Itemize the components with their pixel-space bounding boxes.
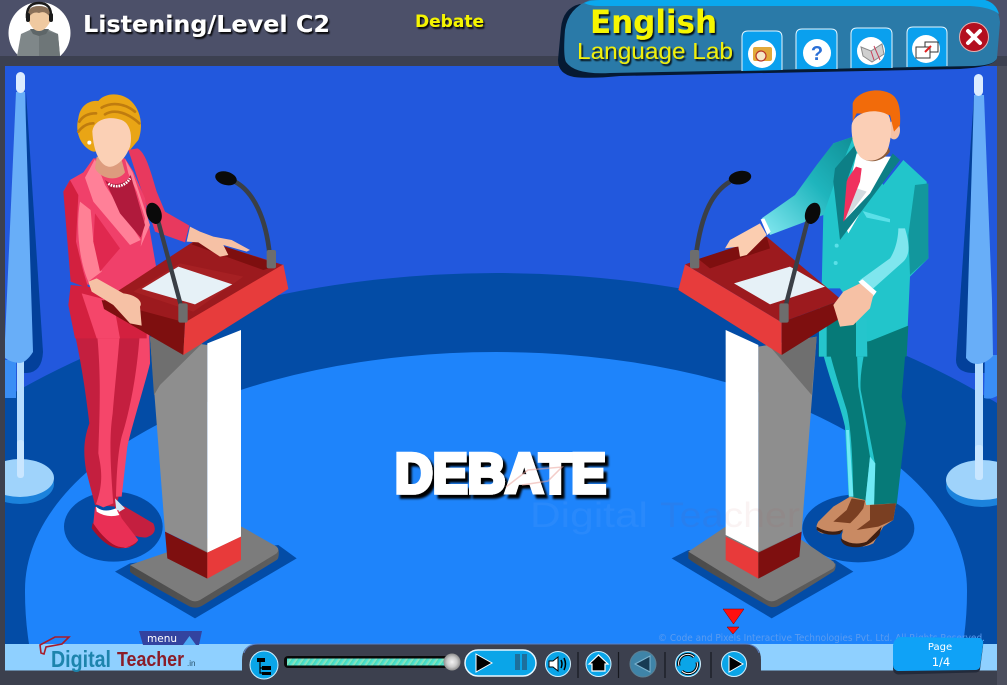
progress slider [284,654,460,670]
neck [95,157,125,178]
page counter: Page [928,642,952,653]
trousers top [818,289,908,357]
back mic [696,182,730,255]
top header bar [0,0,1007,57]
control bar [242,644,761,685]
front mic [158,222,182,308]
shoes [115,503,155,537]
tab: help: ? [811,43,823,65]
shoes [816,497,867,534]
base plate shadow [672,550,853,618]
tab: help [796,29,837,69]
left lamp [0,72,54,504]
foot shadow [802,494,914,562]
podium top [685,237,842,322]
next button [722,652,746,676]
menu tab [139,631,202,645]
bright blue platform [25,352,967,644]
watermark: Teacher [660,496,800,535]
tab: folder clock [742,31,782,71]
heading: English: English [590,3,717,41]
watermark: Digital [530,496,648,535]
foot shadow [64,492,163,562]
title: Listening/Level C2: Listening/Level C2 [83,12,330,38]
base plate [688,552,836,607]
paper [734,267,825,304]
paper [142,267,232,304]
right lamp [946,74,997,507]
replay button [676,652,700,676]
dark blue back platform [5,273,997,644]
icon: graduation cap [40,637,69,654]
pillar [758,337,817,552]
shaded sleeve [908,183,928,275]
back button disabled [630,651,656,677]
hair [77,94,141,152]
woman upper body and left podium [63,94,288,355]
subtitle: Debate: Debate [415,12,484,32]
speaker button [546,652,570,676]
front mic [785,222,807,308]
tab: resize [907,27,947,67]
logo: Digital Teacher: .in [187,659,195,668]
back mic [235,182,270,258]
page counter: 1/4 [932,655,950,669]
trousers top [68,285,147,338]
trousers [74,330,150,507]
cuffs [761,218,771,235]
woman legs and left podium base [64,330,297,618]
watermark [530,496,800,535]
panel: English Language Lab [558,0,1000,78]
blouse [105,175,145,238]
jacket [63,158,157,297]
pocket [863,211,890,222]
neck [858,142,890,161]
hair [853,90,900,132]
left arm [762,137,853,235]
home button [586,652,611,676]
frame band [0,56,1007,66]
page counter [893,637,983,674]
tree menu button [250,651,278,679]
man upper body and right podium [678,90,928,357]
sleeve highlight [860,228,909,288]
base plate shadow [115,545,297,618]
podium faces [102,300,185,355]
logo: Digital Teacher: Digital [51,646,111,672]
tie [842,167,862,228]
earring [87,141,91,145]
menu tab: menu [147,633,177,645]
play and pause button [465,650,536,676]
marker: red triangles [723,609,744,634]
face [92,118,131,167]
right sleeve [128,148,189,242]
heading: Language Lab: Language Lab [577,38,733,64]
hands [725,223,767,257]
buttons [835,244,839,248]
watermark cap [506,467,562,487]
heading: DEBATE: DEBATE [395,442,606,504]
ear [888,121,900,139]
copyright line: © Code and Pixels Interactive Technologies Pvt. Ltd. All Rights Reserved. [658,633,985,644]
jacket [822,137,928,342]
hand on front edge [88,278,142,326]
lapels [833,145,900,240]
base plate [130,550,279,608]
logo: Digital Teacher [40,637,195,672]
avatar: listener with headphones [8,2,70,64]
shirt [842,153,893,233]
trousers [830,341,906,505]
bottom frame [0,670,1007,685]
podium top [102,238,283,323]
close button [960,22,988,52]
face [852,111,891,161]
podium faces [678,264,782,355]
hand on back edge [187,227,250,257]
tab: book [851,28,892,68]
pearl necklace [108,178,130,186]
pillar [150,337,207,552]
bottom light strip [5,644,997,670]
man legs and right podium base [672,330,914,618]
logo: Digital Teacher: Teacher [117,648,184,671]
